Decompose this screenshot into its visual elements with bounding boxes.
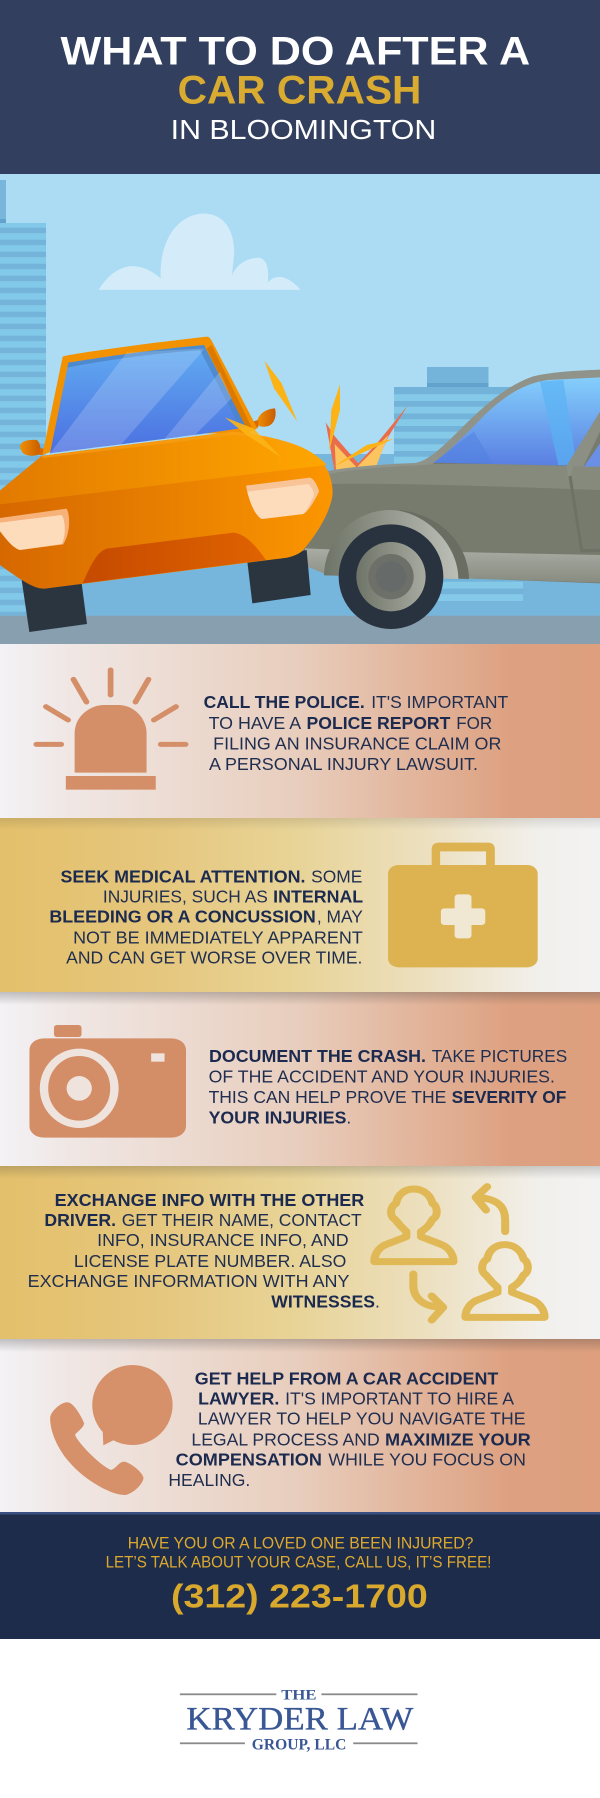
text: get help — [168, 1368, 531, 1490]
logo: the Kryder Law Group — [180, 1687, 418, 1753]
panel: exchange info — [0, 1166, 600, 1339]
right building — [394, 367, 523, 601]
text: get help: IT'S IMPORTANT TO HIRE A — [285, 1388, 514, 1408]
car body — [0, 432, 333, 589]
text: seek medical attention: SOME — [311, 866, 362, 886]
panel: seek medical attention — [0, 818, 600, 992]
windshield glass — [50, 345, 246, 453]
text: exchange info: WITNESSES — [271, 1292, 375, 1312]
icon: camera — [29, 1025, 186, 1138]
text: document the crash: THIS CAN HELP PROVE THE — [209, 1087, 446, 1107]
orange car — [0, 337, 333, 632]
text: call the police: FILING AN INSURANCE CLAIM OR — [213, 734, 501, 754]
road — [0, 616, 600, 644]
call to action panel — [0, 1512, 600, 1639]
text: exchange info: EXCHANGE INFO WITH THE OTHER — [55, 1190, 365, 1210]
text: call the police — [204, 692, 508, 774]
wheel arch — [400, 510, 469, 579]
text: seek medical attention: , MAY — [317, 906, 363, 926]
sill — [305, 548, 600, 583]
icon: phone with speech bubble — [50, 1365, 173, 1495]
wheel — [339, 524, 443, 629]
icon: two people exchanging — [374, 1187, 545, 1320]
panel: get help from a lawyer — [0, 1339, 600, 1512]
text: get help: MAXIMIZE YOUR — [385, 1429, 531, 1449]
windshield — [433, 377, 600, 466]
text: get help: LAWYER. — [198, 1388, 279, 1408]
tires — [22, 580, 87, 632]
text: get help: GET HELP FROM A CAR ACCIDENT — [195, 1368, 499, 1388]
right headlight — [246, 478, 319, 519]
left building — [0, 180, 46, 616]
text: get help: LEGAL PROCESS AND — [191, 1429, 380, 1449]
cloud — [99, 214, 300, 290]
text: call the police: POLICE REPORT — [306, 713, 451, 733]
text: document the crash: SEVERITY OF — [452, 1087, 567, 1107]
cta text line one: HAVE YOU OR A LOVED ONE BEEN INJURED? — [128, 1534, 473, 1552]
text: get help: COMPENSATION — [176, 1449, 322, 1469]
text: seek medical attention: SEEK MEDICAL ATTENTION. — [60, 866, 306, 886]
text: seek medical attention: AND CAN GET WORSE OVER TIME. — [66, 947, 362, 967]
lower grille — [83, 533, 266, 583]
grey car — [303, 370, 600, 629]
ground strip — [80, 500, 600, 616]
text: call the police: CALL THE POLICE. — [204, 692, 365, 712]
windshield frame — [42, 337, 257, 455]
door pillar — [567, 412, 600, 477]
title line: car crash: CAR CRASH — [178, 69, 421, 113]
text: call the police: IT'S IMPORTANT — [371, 692, 508, 712]
text: exchange info: INFO, INSURANCE INFO, AND — [97, 1230, 349, 1250]
text: get help: WHILE YOU FOCUS ON — [328, 1449, 526, 1469]
panel: document the crash — [0, 992, 600, 1166]
flames — [326, 406, 408, 473]
icon: siren — [36, 670, 186, 790]
text: exchange info — [28, 1190, 380, 1312]
text: document the crash: TAKE PICTURES — [432, 1046, 567, 1066]
hero illustration: car crash scene — [0, 174, 600, 644]
text: get help: LAWYER TO HELP YOU NAVIGATE THE — [198, 1408, 526, 1428]
logo: the Kryder Law Group: THE — [281, 1687, 316, 1703]
text: call the police: TO HAVE A — [209, 713, 302, 733]
left headlight — [0, 509, 69, 550]
phone number: (312) 223-1700 — [171, 1577, 428, 1614]
icon: first aid kit — [388, 843, 538, 967]
cta text line two: LET’S TALK ABOUT YOUR CASE, CALL US, IT’S FREE! — [106, 1553, 491, 1571]
text: exchange info: EXCHANGE INFORMATION WITH ANY — [28, 1271, 350, 1291]
car body — [303, 370, 600, 583]
sparks — [225, 361, 394, 467]
header panel — [0, 0, 600, 174]
mirrors — [20, 440, 41, 456]
logo: the Kryder Law Group: KRYDER LAW — [186, 1701, 414, 1737]
logo: the Kryder Law Group: GROUP, LLC — [252, 1736, 346, 1753]
subtitle: in Bloomington: IN BLOOMINGTON — [171, 114, 436, 145]
text: exchange info: LICENSE PLATE NUMBER. ALSO — [74, 1251, 346, 1271]
title line: what to do after a: WHAT TO DO AFTER A — [60, 29, 530, 73]
text: exchange info: . — [375, 1292, 380, 1312]
text: exchange info: GET THEIR NAME, CONTACT — [122, 1210, 362, 1230]
text: call the police: FOR — [456, 713, 492, 733]
text: seek medical attention: INTERNAL — [273, 886, 364, 906]
text: seek medical attention: BLEEDING OR A CONCUSSION — [49, 906, 316, 926]
text: exchange info: DRIVER. — [44, 1210, 116, 1230]
panel: call the police — [0, 644, 600, 818]
text: document the crash — [209, 1046, 567, 1127]
text: seek medical attention: NOT BE IMMEDIATELY APPARENT — [73, 927, 363, 947]
text: call the police: A PERSONAL INJURY LAWSUIT. — [209, 754, 478, 774]
text: document the crash: OF THE ACCIDENT AND YOUR INJURIES. — [209, 1066, 555, 1086]
text: document the crash: DOCUMENT THE CRASH. — [209, 1046, 426, 1066]
text: document the crash: . — [346, 1107, 351, 1127]
text: document the crash: YOUR INJURIES — [209, 1107, 346, 1127]
text: seek medical attention — [49, 866, 364, 967]
text: get help: HEALING. — [168, 1470, 250, 1490]
text: seek medical attention: INJURIES, SUCH AS — [103, 886, 268, 906]
